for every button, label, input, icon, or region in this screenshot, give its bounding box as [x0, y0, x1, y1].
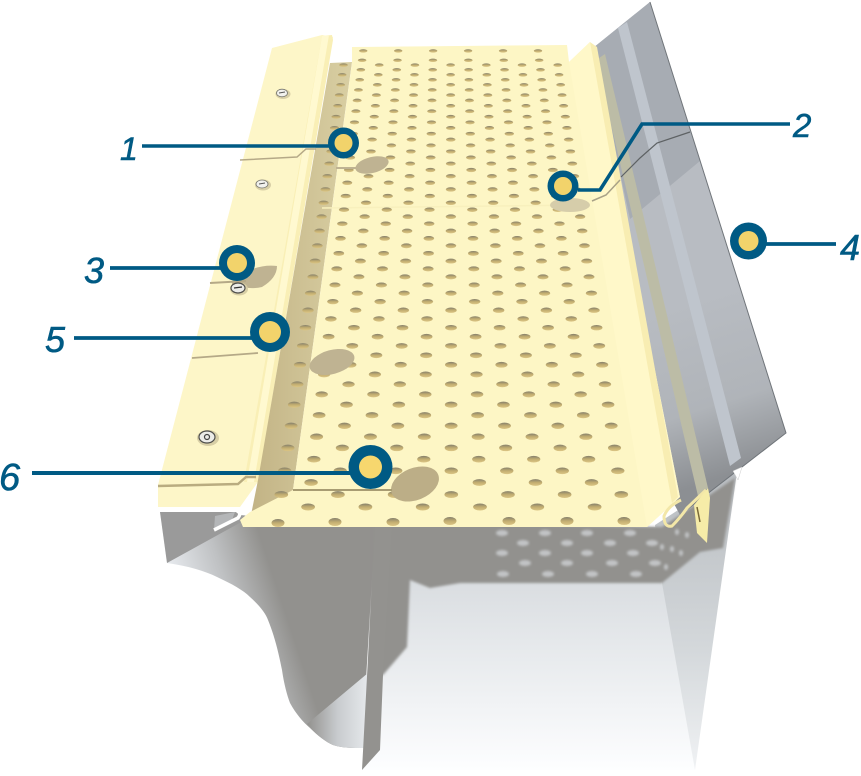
callout 3 [84, 245, 255, 291]
shadow of marker 2 [550, 180, 620, 212]
front edge notches [272, 517, 630, 527]
lower flap highlight [307, 673, 368, 748]
callout 4: 4 [840, 227, 860, 268]
right ridge [590, 42, 678, 503]
metal drip edge [593, 2, 786, 515]
callout 4 [730, 222, 860, 268]
screw 4 [197, 430, 219, 446]
metal crease [621, 132, 690, 177]
callout 5: 5 [45, 319, 66, 360]
olive strip [596, 54, 708, 496]
shadow of marker 6 [293, 460, 444, 508]
small white fragment [733, 467, 742, 480]
callout 5 [45, 312, 290, 360]
callout 2: 2 [792, 107, 811, 144]
left flange [158, 35, 333, 507]
back wall [362, 527, 695, 770]
shadow of marker 5 [192, 344, 357, 380]
gutter hook [160, 510, 240, 530]
central vertical strip [362, 527, 392, 770]
callout shadows [192, 149, 620, 508]
shadow of marker 3 [210, 266, 277, 288]
perforated guard panel [240, 42, 680, 527]
callout 1 [120, 128, 359, 167]
light band [618, 22, 741, 466]
metal outer edge [650, 2, 786, 515]
left flap upper shade [160, 512, 245, 563]
shadow of marker 1 [240, 149, 390, 177]
right side wall [655, 472, 737, 770]
flange ridge [244, 35, 333, 482]
drainage channel [250, 62, 352, 520]
callout 2 [548, 107, 811, 202]
callout 6 [0, 445, 392, 499]
callout 1: 1 [120, 131, 138, 167]
upper metal section [593, 2, 700, 219]
flange ridge highlight [247, 35, 329, 482]
perforation rows [274, 49, 628, 510]
right fold [569, 42, 680, 527]
screws [197, 89, 290, 446]
callout 3: 3 [84, 250, 104, 291]
screw 1 [276, 89, 290, 99]
shadow under guard [370, 478, 735, 675]
screw 3 [230, 282, 248, 296]
yellow retaining clip [664, 488, 710, 543]
flange fold line [158, 477, 256, 486]
holes of light in shadow [496, 529, 689, 577]
panel seam [322, 205, 590, 208]
left front flap [160, 512, 375, 748]
screw 2 [255, 180, 271, 190]
gutter interior [160, 472, 737, 770]
